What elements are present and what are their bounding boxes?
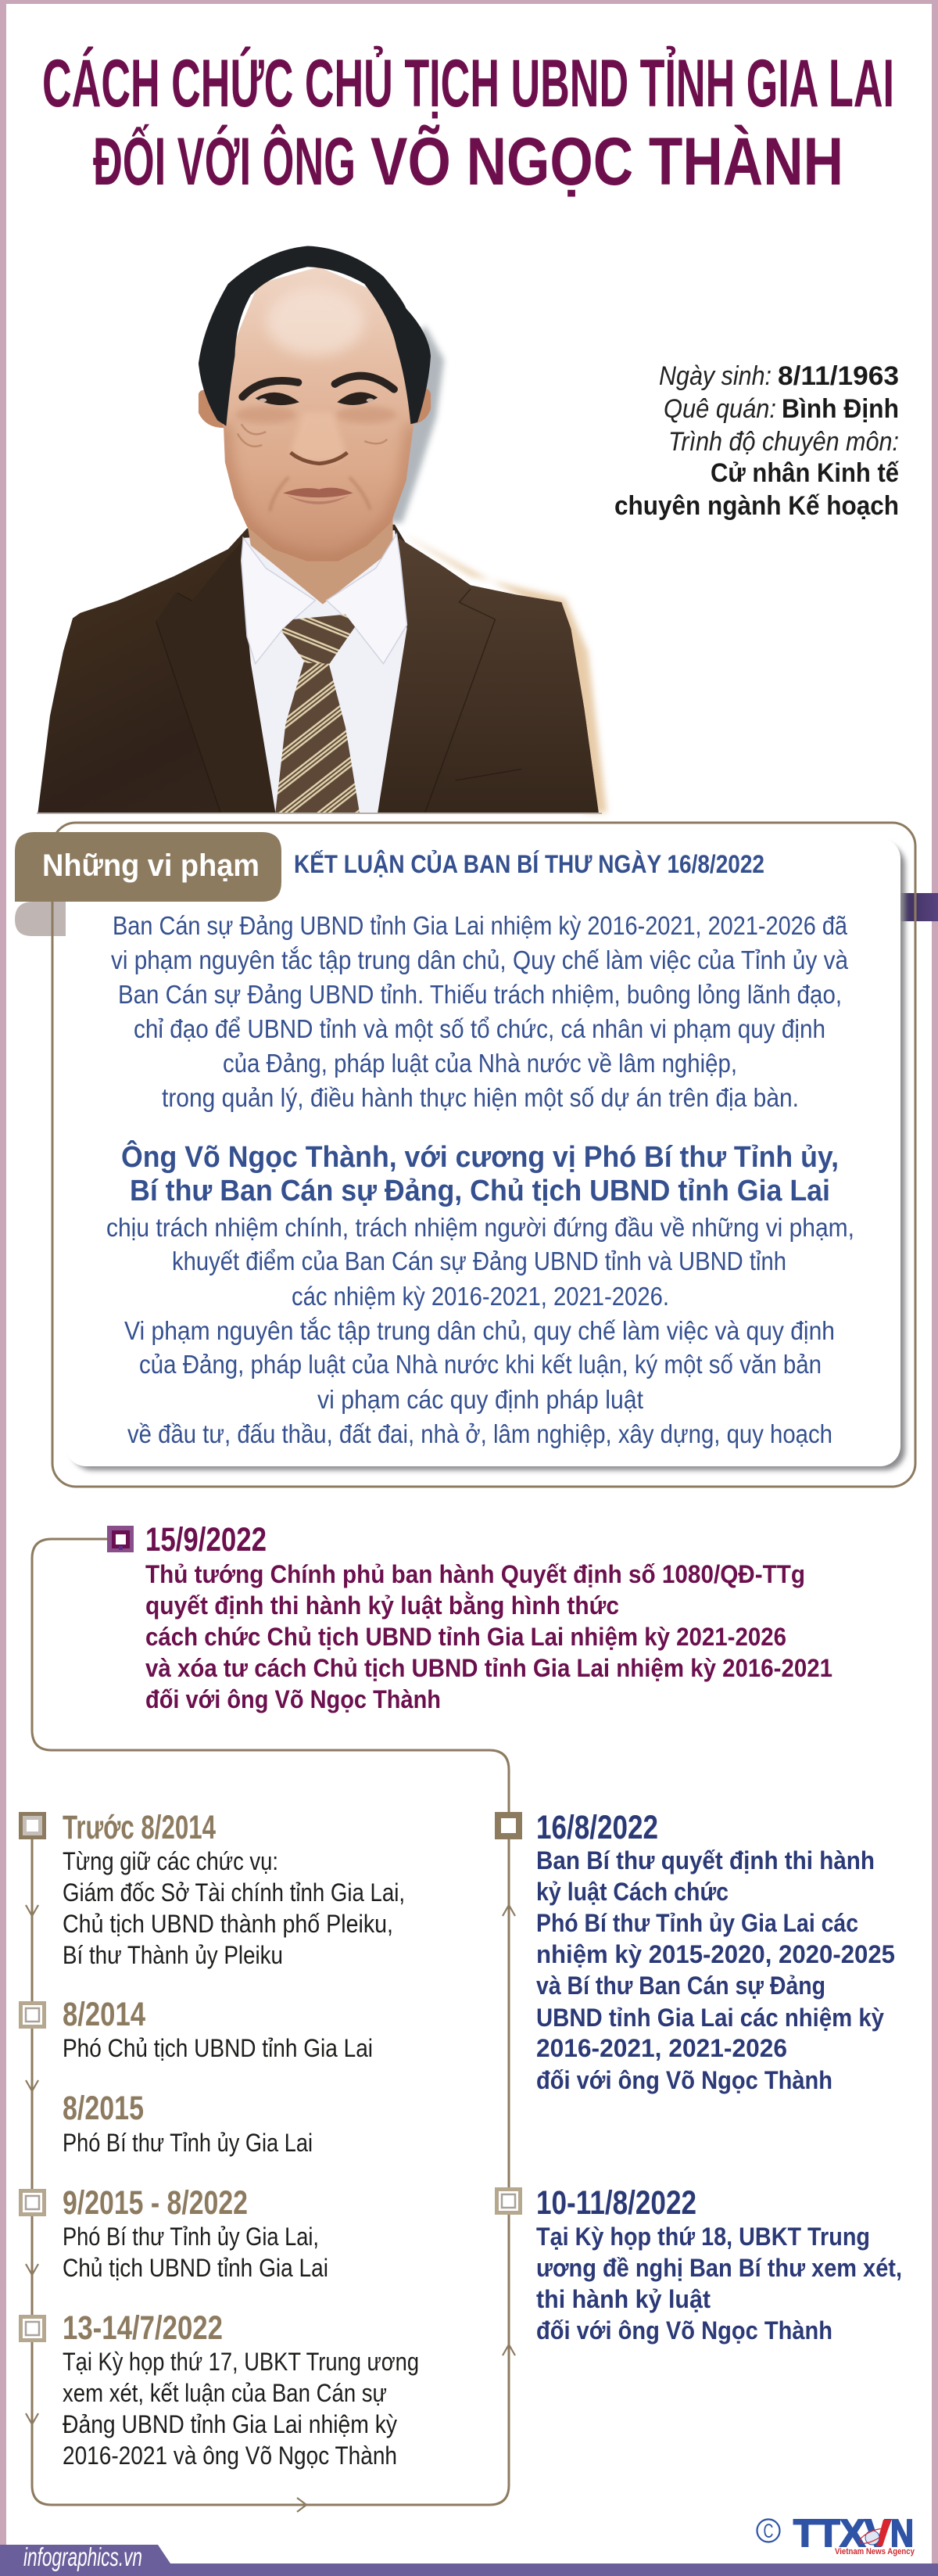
arrow: down 1 xyxy=(26,1905,38,1916)
event: 8/2015 xyxy=(63,2090,313,2157)
arrow: down 4 xyxy=(26,2413,38,2424)
footer bar: infographics.vn xyxy=(23,2542,142,2571)
title: ĐỐI VỚI ÔNG xyxy=(93,124,356,199)
personal info: Bình Định xyxy=(782,394,899,424)
event: 15/9/2022: 15/9/2022 xyxy=(145,1521,267,1559)
event: 10-11/8/2022: 10-11/8/2022 xyxy=(536,2184,696,2222)
event: before 8/2014: Từng giữ các chức vụ: xyxy=(63,1847,278,1875)
left ear xyxy=(199,390,224,428)
text block: prime minister decision: đối với ông Võ Ngọc Thành xyxy=(145,1685,441,1713)
white card xyxy=(66,838,900,1466)
footer bar xyxy=(0,2542,938,2576)
tab xyxy=(15,832,281,902)
text block: personal responsibility detail: khuyết điểm của Ban Cán sự Đảng UBND tỉnh và UBND tỉnh xyxy=(172,1247,786,1275)
event: 13-14/7/2022: xem xét, kết luận của Ban Cán sự xyxy=(63,2379,387,2407)
icon: light marker xyxy=(19,2001,46,2029)
personal info: Quê quán: xyxy=(664,394,776,424)
hair xyxy=(199,246,431,426)
logo: TTXVN xyxy=(757,2513,915,2556)
event: 10-11/8/2022: ương đề nghị Ban Bí thư xem xét, xyxy=(536,2254,902,2282)
text block: personal responsibility heading: Ông Võ Ngọc Thành, với cương vị Phó Bí thư Tỉnh ủy, xyxy=(121,1139,839,1174)
nose xyxy=(291,413,347,464)
portrait photo xyxy=(38,246,607,813)
text block: party committee violations: của Đảng, pháp luật của Nhà nước về lâm nghiệp, xyxy=(223,1049,737,1078)
event: 10-11/8/2022: thi hành kỷ luật xyxy=(536,2285,711,2313)
personal info: 8/11/1963 xyxy=(778,361,899,391)
outer frame xyxy=(52,823,915,1487)
logo: TTXVN: TTX xyxy=(793,2513,865,2555)
personal info xyxy=(614,361,899,521)
necktie xyxy=(275,615,360,813)
eyebrows xyxy=(242,376,394,396)
event: 9/2015 - 8/2022: Phó Bí thư Tỉnh ủy Gia Lai, xyxy=(63,2223,319,2251)
icon: copyright: C xyxy=(763,2520,774,2542)
arrow: up 1 xyxy=(503,2345,515,2355)
event: 16/8/2022: 2016-2021, 2021-2026 xyxy=(536,2034,787,2062)
text block: party committee violations: Ban Cán sự Đảng UBND tỉnh. Thiếu trách nhiệm, buông lỏng lãnh đạo, xyxy=(118,980,842,1009)
heading: conclusion: KẾT LUẬN CỦA BAN BÍ THƯ NGÀY 16/8/2022 xyxy=(294,850,764,878)
text block: prime minister decision: và xóa tư cách Chủ tịch UBND tỉnh Gia Lai nhiệm kỳ 2016-2021 xyxy=(145,1654,832,1682)
event: 9/2015 - 8/2022: Chủ tịch UBND tỉnh Gia Lai xyxy=(63,2254,328,2282)
tab fold xyxy=(15,902,66,936)
event: 13-14/7/2022: Đảng UBND tỉnh Gia Lai nhiệm kỳ xyxy=(63,2410,397,2438)
event: before 8/2014: Bí thư Thành ủy Pleiku xyxy=(63,1941,283,1969)
face xyxy=(224,267,414,561)
icon: dark marker xyxy=(495,1812,522,1839)
event: 16/8/2022: nhiệm kỳ 2015-2020, 2020-2025 xyxy=(536,1940,895,1968)
right ear xyxy=(410,389,431,424)
event: 9/2015 - 8/2022: 9/2015 - 8/2022 xyxy=(63,2184,248,2222)
mouth xyxy=(283,488,353,504)
event: 16/8/2022 xyxy=(495,1809,895,2094)
text block: personal responsibility detail: vi phạm các quy định pháp luật xyxy=(317,1385,643,1414)
logo: TTXVN: V xyxy=(865,2513,891,2555)
event: 16/8/2022: UBND tỉnh Gia Lai các nhiệm kỳ xyxy=(536,2004,884,2032)
event: 8/2015: 8/2015 xyxy=(63,2090,144,2127)
event: 8/2014: 8/2014 xyxy=(63,1996,145,2033)
event: 13-14/7/2022: Tại Kỳ họp thứ 17, UBKT Trung ương xyxy=(63,2348,419,2376)
arrow: down 2 xyxy=(26,2080,38,2091)
text block: prime minister decision xyxy=(145,1560,832,1713)
arrow: right xyxy=(297,2498,306,2512)
event: 10-11/8/2022: Tại Kỳ họp thứ 18, UBKT Trung xyxy=(536,2223,870,2251)
event: 16/8/2022: Ban Bí thư quyết định thi hành xyxy=(536,1846,875,1875)
event: before 8/2014 xyxy=(19,1809,405,1969)
event: 15/9/2022 xyxy=(107,1521,832,1713)
text block: prime minister decision: Thủ tướng Chính phủ ban hành Quyết định số 1080/QĐ-TTg xyxy=(145,1560,805,1588)
suit jacket xyxy=(38,525,599,813)
event: 16/8/2022: 16/8/2022 xyxy=(536,1809,658,1846)
event: 16/8/2022: kỷ luật Cách chức xyxy=(536,1878,729,1906)
photo base line xyxy=(37,813,602,814)
event: 8/2014: Phó Chủ tịch UBND tỉnh Gia Lai xyxy=(63,2034,373,2062)
event: before 8/2014: Trước 8/2014 xyxy=(63,1809,216,1846)
text block: personal responsibility detail: Vi phạm nguyên tắc tập trung dân chủ, quy chế làm việc và quy định xyxy=(124,1316,835,1345)
purple stripe xyxy=(900,893,938,921)
event: 8/2015: Phó Bí thư Tỉnh ủy Gia Lai xyxy=(63,2129,313,2157)
text block: party committee violations: Ban Cán sự Đảng UBND tỉnh Gia Lai nhiệm kỳ 2016-2021, 2021-2026 đã xyxy=(113,911,848,940)
text block: personal responsibility detail: chịu trách nhiệm chính, trách nhiệm người đứng đầu về những vi phạm, xyxy=(106,1213,854,1242)
event: before 8/2014: Giám đốc Sở Tài chính tỉnh Gia Lai, xyxy=(63,1878,405,1907)
icon: light marker xyxy=(19,2315,46,2342)
icon: light marker xyxy=(495,2187,522,2215)
personal info: Trình độ chuyên môn: xyxy=(668,427,899,457)
event: 8/2014 xyxy=(19,1996,373,2062)
event: 9/2015 - 8/2022 xyxy=(19,2184,328,2282)
logo: TTXVN: N xyxy=(890,2513,914,2555)
event: 13-14/7/2022 xyxy=(19,2309,419,2470)
timeline connector xyxy=(26,1539,515,2512)
event: before 8/2014: Chủ tịch UBND thành phố Pleiku, xyxy=(63,1910,393,1938)
event: 16/8/2022: đối với ông Võ Ngọc Thành xyxy=(536,2066,832,2094)
icon: dark marker xyxy=(19,1812,46,1839)
arrow: up 2 xyxy=(503,1905,515,1916)
text block: personal responsibility detail xyxy=(106,1213,854,1448)
personal info: Ngày sinh: xyxy=(659,361,772,391)
event: 13-14/7/2022: 13-14/7/2022 xyxy=(63,2309,223,2347)
event: 10-11/8/2022: đối với ông Võ Ngọc Thành xyxy=(536,2316,832,2345)
text block: personal responsibility detail: về đầu tư, đấu thầu, đất đai, nhà ở, lâm nghiệp, xây dựng, quy hoạch xyxy=(127,1419,832,1448)
text block: party committee violations: trong quản lý, điều hành thực hiện một số dự án trên địa bàn. xyxy=(162,1083,799,1112)
panel: violations xyxy=(15,823,938,1487)
text block: personal responsibility detail: của Đảng, pháp luật của Nhà nước khi kết luận, ký một số văn bản xyxy=(139,1350,822,1379)
personal info: Cử nhân Kinh tế xyxy=(711,458,899,488)
text block: personal responsibility heading: Bí thư Ban Cán sự Đảng, Chủ tịch UBND tỉnh Gia Lai xyxy=(130,1175,830,1207)
icon: copyright xyxy=(757,2520,780,2542)
text block: prime minister decision: quyết định thi hành kỷ luật bằng hình thức xyxy=(145,1591,619,1620)
event: 10-11/8/2022 xyxy=(495,2184,902,2345)
shirt and neck xyxy=(242,515,407,813)
eyes xyxy=(256,392,378,405)
event: 16/8/2022: Phó Bí thư Tỉnh ủy Gia Lai các xyxy=(536,1909,858,1937)
text block: personal responsibility detail: các nhiệm kỳ 2016-2021, 2021-2026. xyxy=(292,1282,669,1311)
title: VÕ NGỌC THÀNH xyxy=(371,124,843,199)
text block: prime minister decision: cách chức Chủ tịch UBND tỉnh Gia Lai nhiệm kỳ 2021-2026 xyxy=(145,1623,786,1651)
logo: TTXVN: Vietnam News Agency xyxy=(835,2547,915,2556)
title xyxy=(42,46,894,199)
tab label: Những vi phạm xyxy=(42,849,260,883)
card shadow xyxy=(72,845,905,1470)
personal info: chuyên ngành Kế hoạch xyxy=(614,491,899,521)
arrow: down 3 xyxy=(26,2264,38,2275)
text block: party committee violations: vi phạm nguyên tắc tập trung dân chủ, Quy chế làm việc của Tỉnh ủy và xyxy=(111,945,849,974)
icon: purple marker xyxy=(107,1526,134,1552)
event: 13-14/7/2022: 2016-2021 và ông Võ Ngọc Thành xyxy=(63,2441,397,2470)
text block: personal responsibility heading xyxy=(121,1139,839,1207)
icon: light marker xyxy=(19,2189,46,2216)
text block: party committee violations: chỉ đạo để UBND tỉnh và một số tổ chức, cá nhân vi phạm quy định xyxy=(134,1014,825,1043)
text block: party committee violations xyxy=(111,911,849,1112)
event: 16/8/2022: và Bí thư Ban Cán sự Đảng xyxy=(536,1971,825,2000)
